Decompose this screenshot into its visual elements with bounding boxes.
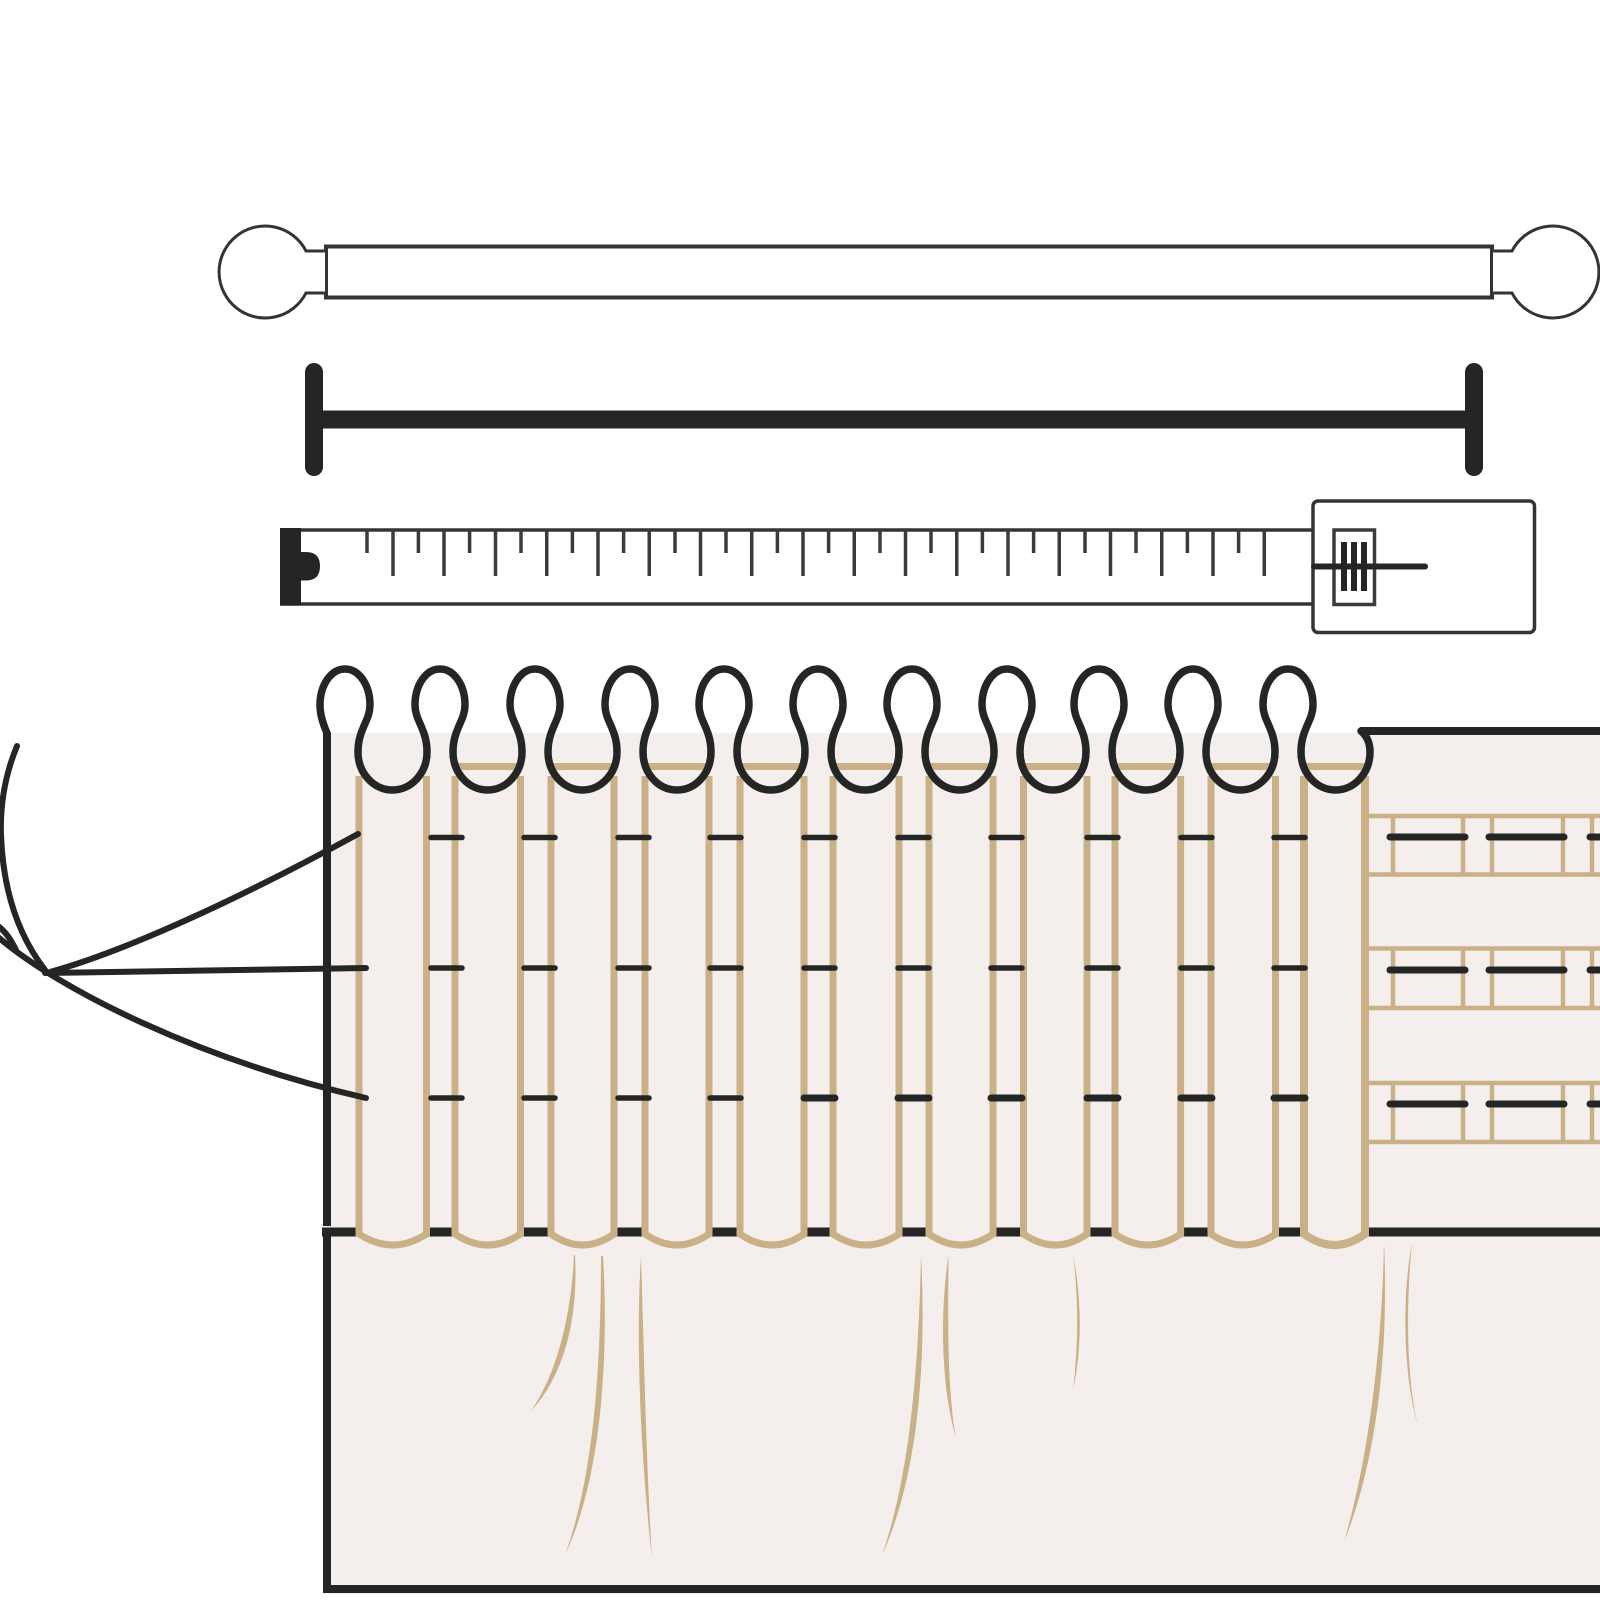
tape tick marks: [367, 530, 1264, 576]
tape housing: [1313, 501, 1534, 632]
tan lines inside pleat tops: [456, 763, 1367, 770]
flat fabric stitched bands: [1366, 816, 1600, 1142]
curtain outline: [327, 731, 1600, 1589]
pleat folds: [359, 776, 1365, 1245]
heading tape seam line: [322, 1228, 1600, 1236]
thicker lower stitches: [804, 1094, 1305, 1102]
stitches across pleats: [431, 838, 1305, 1098]
gathered top edge serpentine: [320, 669, 1370, 790]
pulled gathering threads: [0, 746, 366, 1098]
icon: curtain rod with ball finials: [219, 226, 1599, 318]
tape pull line: [1314, 564, 1425, 570]
icon: width dimension line: [314, 372, 1474, 467]
icon: measuring tape: [280, 501, 1534, 632]
drape folds: [530, 1243, 1418, 1558]
tape lock bars: [1344, 542, 1364, 591]
running stitches on flat fabric: [1390, 837, 1600, 1104]
tape strip: [282, 530, 1314, 604]
tape end hook: [280, 528, 320, 606]
fabric background: [323, 733, 1600, 1594]
curtain panel: [0, 669, 1600, 1594]
tape window: [1334, 530, 1374, 604]
